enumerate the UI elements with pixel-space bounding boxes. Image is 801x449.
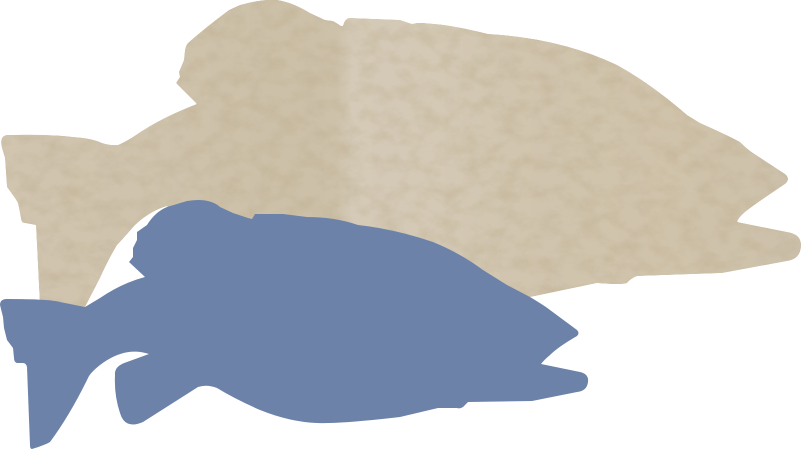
- small blue fish: [0, 200, 588, 449]
- large tan textured fish: [1, 0, 801, 310]
